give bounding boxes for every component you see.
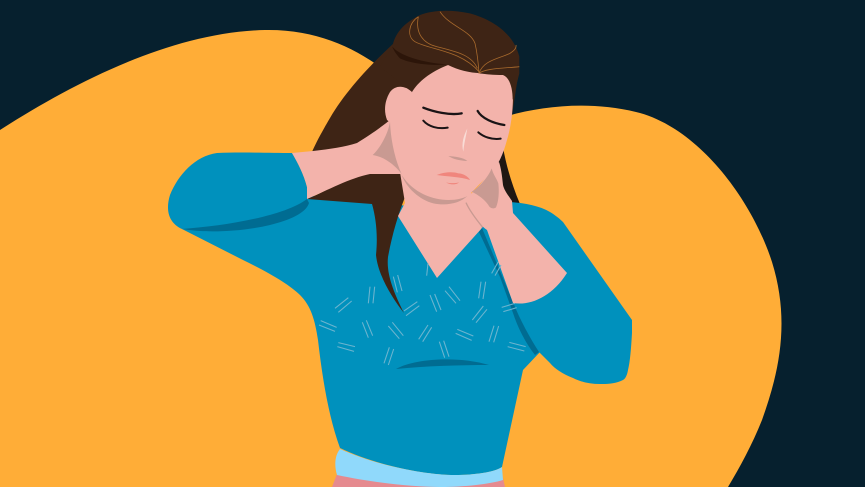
left eyebrow <box>423 108 462 114</box>
trousers <box>332 474 505 487</box>
left eye <box>423 121 448 128</box>
hair top <box>380 11 519 100</box>
face <box>390 65 513 203</box>
hair strands <box>410 12 519 73</box>
forearm shadow <box>479 228 539 355</box>
right eyebrow <box>478 111 504 125</box>
face details <box>373 11 519 227</box>
neck shadow <box>373 122 402 174</box>
finger line <box>466 203 483 227</box>
waistband <box>335 449 503 487</box>
raised arm <box>292 120 402 199</box>
left sleeve <box>168 153 307 230</box>
ear <box>385 87 412 130</box>
nose highlight <box>463 128 467 152</box>
sleeve shadow <box>182 199 309 231</box>
upper lip <box>437 172 470 180</box>
right sleeve <box>490 202 632 384</box>
right eye <box>478 132 501 139</box>
hand shadow <box>472 168 499 208</box>
long hair behind <box>312 42 519 190</box>
hair behind hand <box>495 147 520 206</box>
belly fold shadow <box>396 359 489 369</box>
nose shadow <box>448 156 467 161</box>
torso and sleeve <box>168 153 540 475</box>
hand and forearm <box>466 162 567 304</box>
neck and chest <box>398 160 482 278</box>
jaw shadow <box>402 175 467 204</box>
sweater fibre marks <box>319 262 526 365</box>
hair under arm and strand <box>307 165 405 313</box>
hair fold shadow <box>392 47 447 65</box>
lower lip <box>446 182 459 184</box>
